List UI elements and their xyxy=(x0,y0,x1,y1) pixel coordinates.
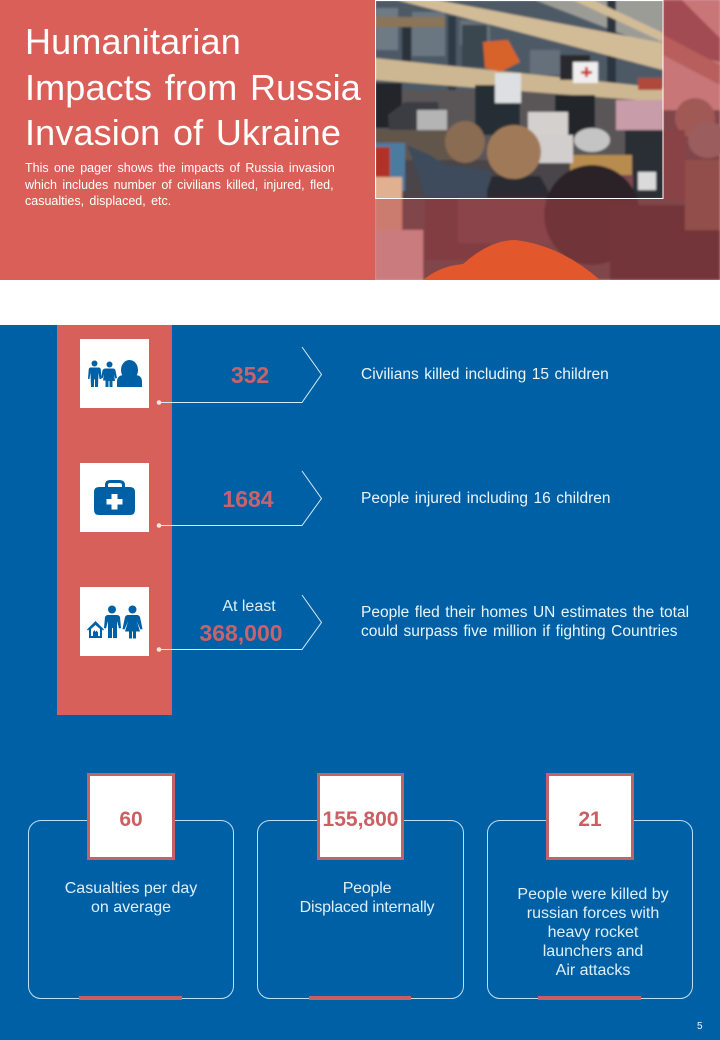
intro text: This one pager shows the impacts of Russia invasion xyxy=(25,161,335,175)
card: killed by attacks xyxy=(487,820,693,999)
number: 352: 352 xyxy=(231,362,269,388)
description: fled xyxy=(361,604,689,640)
icon: family and home xyxy=(80,587,149,656)
icon: family xyxy=(80,339,149,408)
red tint xyxy=(375,0,720,280)
number: 368,000: 368,000 xyxy=(199,620,283,646)
card text: killed: Air attacks xyxy=(556,962,630,979)
description: fled: People fled their homes UN estimates the total xyxy=(361,604,689,621)
card text: displaced xyxy=(300,880,434,916)
connector: 352 xyxy=(157,347,322,405)
intro text xyxy=(25,161,335,208)
connector: 1684 xyxy=(157,471,322,528)
accent bar 3 xyxy=(538,996,641,1000)
card text: killed: heavy rocket xyxy=(548,924,638,941)
card text: killed xyxy=(517,886,669,979)
orange jacket xyxy=(423,240,600,280)
card: casualties xyxy=(28,820,234,999)
icon: medical kit xyxy=(80,463,149,532)
accent bar 1 xyxy=(79,996,182,1000)
card text: casualties: on average xyxy=(91,899,171,916)
title: Humanitarian xyxy=(25,21,241,62)
red vertical strip xyxy=(57,325,172,715)
card text: displaced: Displaced internally xyxy=(300,899,434,916)
connector: 368,000 xyxy=(157,595,322,652)
card text: killed: russian forces with xyxy=(527,905,659,922)
card: displaced xyxy=(257,820,464,999)
header panel xyxy=(0,0,375,280)
header photo: crowd at aid truck xyxy=(375,0,720,280)
intro text: which includes number of civilians killed, injured, fled, xyxy=(25,178,334,192)
blue background panel xyxy=(0,325,720,1040)
description: killed: Civilians killed including 15 children xyxy=(361,366,609,383)
title: Impacts from Russia xyxy=(25,66,361,108)
card text: killed: People were killed by xyxy=(517,886,669,903)
description: injured: People injured including 16 children xyxy=(361,490,611,507)
number: 1684: 1684 xyxy=(222,486,274,512)
stat box: 155,800 xyxy=(317,773,404,860)
description: fled: could surpass five million if fighting Countries xyxy=(361,623,677,640)
stat box: 21: 21 xyxy=(578,808,602,831)
stat box: 60: 60 xyxy=(119,808,143,831)
page number: 5 xyxy=(697,1021,703,1032)
title: Invasion of Ukraine xyxy=(25,112,341,153)
title xyxy=(25,21,361,153)
connectors and chevrons xyxy=(156,346,322,652)
stat box: 21 xyxy=(546,773,634,860)
stat box: 155,800: 155,800 xyxy=(323,808,398,831)
card text: casualties: Casualties per day xyxy=(65,880,197,897)
card text: killed: launchers and xyxy=(543,943,643,960)
stat box: 60 xyxy=(87,773,175,860)
accent bar 2 xyxy=(309,996,411,1000)
label: at least: At least xyxy=(222,598,276,615)
card text: casualties xyxy=(65,880,198,916)
intro text: casualties, displaced, etc. xyxy=(25,194,171,208)
card text: displaced: People xyxy=(343,880,391,897)
